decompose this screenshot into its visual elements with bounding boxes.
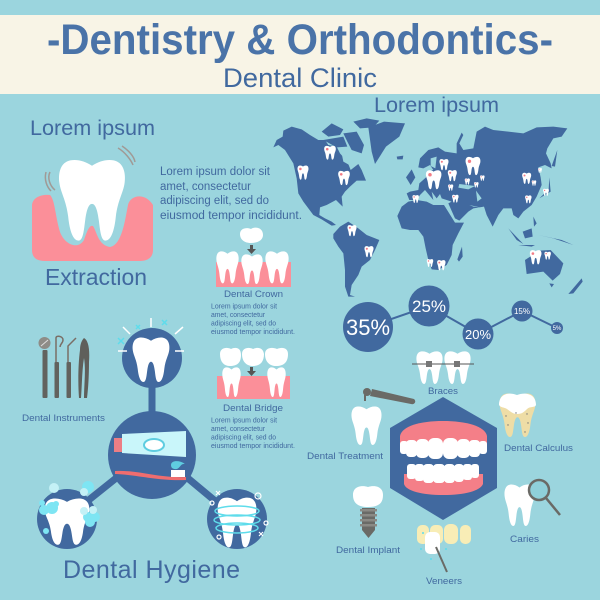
text block: crown [211, 304, 295, 336]
label: veneers: Veneers [426, 576, 462, 587]
label: dental crown: Dental Crown [224, 289, 283, 300]
text block: intro [160, 166, 302, 222]
icon: upper teeth [400, 438, 487, 459]
text block: intro: eiusmod tempor incididunt. [160, 210, 302, 222]
node: 25%: 25% [412, 297, 446, 316]
label: dental treatment: Dental Treatment [307, 451, 383, 462]
subtitle: Dental Clinic [223, 63, 377, 93]
text block: crown: adipiscing elit, sed do [211, 320, 276, 328]
label: dental hygiene: Dental Hygiene [63, 556, 240, 584]
label: dental calculus: Dental Calculus [504, 443, 573, 454]
icon: dental treatment [351, 388, 415, 445]
icon: dental implant [353, 486, 383, 538]
dental instruments icon [38, 336, 89, 398]
icon: lower gum [404, 474, 483, 495]
dental bridge illustration [217, 348, 290, 399]
node: foam tooth [37, 481, 100, 549]
text block: crown: Lorem ipsum dolor sit [211, 304, 277, 310]
heading: extraction: Lorem ipsum [30, 117, 155, 140]
text block: crown: amet, consectetur [211, 312, 266, 319]
node: polished tooth [207, 489, 268, 549]
text block: bridge: amet, consectetur [211, 426, 266, 433]
header band [0, 15, 600, 94]
text block: bridge: adipiscing elit, sed do [211, 434, 276, 442]
dental crown illustration [216, 228, 291, 287]
icon: toothbrush [115, 461, 186, 480]
node: 25% [408, 286, 450, 326]
node: clean tooth [118, 318, 184, 388]
node: toothpaste and brush [108, 411, 196, 499]
label: dental implant: Dental Implant [336, 545, 400, 556]
icon: motion lines [45, 146, 135, 191]
node: 20%: 20% [465, 327, 491, 342]
node: 35%: 35% [346, 315, 390, 340]
label: extraction: Extraction [45, 264, 147, 290]
node: 5%: 5% [553, 326, 562, 332]
icon: veneers [417, 524, 471, 572]
map tooth markers [298, 146, 551, 270]
extraction illustration [32, 146, 153, 261]
text block: intro: amet, consectetur [160, 181, 251, 193]
node: 5% [551, 322, 563, 334]
text block: intro: adipiscing elit, sed do [160, 195, 269, 207]
icon: lower teeth [407, 464, 479, 483]
label: dental instruments: Dental Instruments [22, 413, 105, 424]
hexagon with denture [390, 397, 497, 520]
label: caries: Caries [510, 534, 539, 545]
icon: extracted tooth [59, 160, 125, 241]
node: 15% [512, 300, 532, 322]
node: 15%: 15% [514, 307, 530, 316]
icon: upper gum [400, 421, 487, 450]
node: 35% [343, 302, 393, 352]
text block: bridge: eiusmod tempor incididunt. [211, 443, 295, 450]
text block: bridge: Lorem ipsum dolor sit [211, 418, 277, 424]
label: dental bridge: Dental Bridge [223, 403, 283, 414]
node: 20% [462, 318, 494, 350]
connectors [85, 380, 220, 505]
heading: map: Lorem ipsum [374, 94, 499, 117]
text block: intro: Lorem ipsum dolor sit [160, 166, 271, 178]
icon: toothpaste tube [114, 431, 186, 457]
label: braces: Braces [428, 386, 458, 397]
world map [273, 118, 583, 297]
text block: crown: eiusmod tempor incididunt. [211, 329, 295, 336]
percent chain chart [343, 286, 563, 352]
icon: dental calculus [499, 394, 536, 437]
icon: gum [32, 195, 153, 261]
dental hygiene network [37, 318, 268, 549]
icon: braces [412, 351, 474, 384]
title: -Dentistry & Orthodontics- [47, 16, 553, 64]
icon: caries [504, 480, 560, 526]
text block: bridge [211, 418, 295, 450]
